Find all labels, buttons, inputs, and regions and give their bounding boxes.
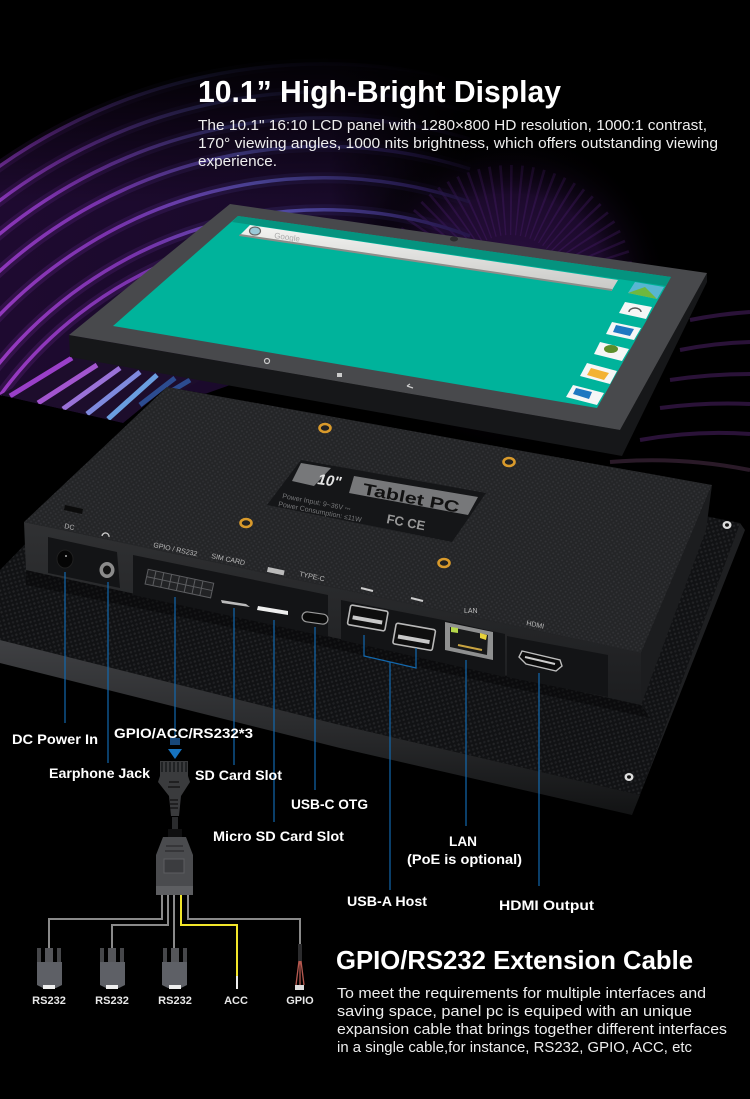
nav icons and camera [264,236,458,388]
port markings: SIM CARD [211,553,246,567]
search bar [239,225,618,291]
connector: RS232 2 [100,948,125,989]
port markings: GPIO / RS232 [153,542,198,558]
port markings [64,523,545,631]
feature labels: GPIO/ACC/RS232*3 [114,725,253,741]
text block: display description: 170° viewing angles, 1000 nits brightness, which offers outstanding viewing [198,135,718,152]
arrow: to cable [168,738,182,759]
text block: extension cable description [337,985,727,1056]
connector labels [32,995,314,1007]
connector: RS232 1 [37,948,62,989]
USB-C port [301,611,329,625]
LAN port [445,622,493,660]
text block: display description [198,117,718,170]
feature labels: Micro SD Card Slot [213,828,344,844]
text block: display description: experience. [198,153,277,170]
port markings: HDMI [526,620,545,631]
cable: junction housing [156,829,193,895]
heading: display: 10.1” High-Bright Display [198,74,562,109]
port markings: LAN [464,608,478,615]
feature labels: HDMI Output [499,897,594,913]
feature labels: LAN [449,833,477,849]
panel: rear base plate [0,395,745,815]
spec label: FC CE [385,511,427,533]
text block: display description: The 10.1" 16:10 LCD panel with 1280×800 HD resolution, 1000:1 contrast, [198,117,707,134]
feature labels: SD Card Slot [195,767,282,783]
SD slot [257,606,288,615]
small latch mark [64,505,83,514]
spec label [267,460,486,542]
connector labels: RS232 [158,995,192,1007]
port recesses [48,537,608,697]
yellow screws [240,424,514,567]
spec label: Tablet PC [361,481,461,517]
DC jack [57,550,73,568]
feature labels [12,725,594,913]
text block: extension cable description: in a single cable,for instance, RS232, GPIO, ACC, etc [337,1039,692,1056]
app icons [566,282,664,405]
port markings: DC [64,523,75,532]
connector: RS232 3 [162,948,187,989]
panel: display front [69,204,707,456]
USB-A ports [345,605,437,651]
heading: extension cable: GPIO/RS232 Extension Cable [336,945,693,975]
HDMI port [519,651,562,671]
connector labels: RS232 [32,995,66,1007]
cable: wires [49,895,300,989]
leader lines [65,572,539,890]
text block: extension cable description: To meet the requirements for multiple interfaces and [337,985,706,1002]
text block: extension cable description: expansion cable that brings together different interfaces [337,1021,727,1038]
spec label: Power Consumption: ≤11W [278,501,362,524]
connector labels: ACC [224,995,248,1007]
text block: extension cable description: saving space, panel pc is equiped with an unique [337,1003,692,1020]
feature labels: DC Power In [12,731,98,747]
spec label: Power Input: 9~36V ⎓ [282,493,351,513]
cable: top plug [158,761,190,837]
spec label: 10" [316,471,343,491]
purple swirl background [0,62,750,472]
connector: GPIO [295,944,304,990]
earphone jack [100,562,114,578]
port markings: TYPE-C [299,571,325,583]
feature labels: (PoE is optional) [407,851,522,867]
micro SD slot [221,600,250,607]
connector labels: RS232 [95,995,129,1007]
panel: rear enclosure [24,387,712,718]
search bar: Google [274,231,301,244]
connector labels: GPIO [286,995,314,1007]
feature labels: USB-C OTG [291,796,368,812]
feature labels: Earphone Jack [49,765,150,781]
feature labels: USB-A Host [347,893,427,909]
GPIO connector [145,569,214,598]
